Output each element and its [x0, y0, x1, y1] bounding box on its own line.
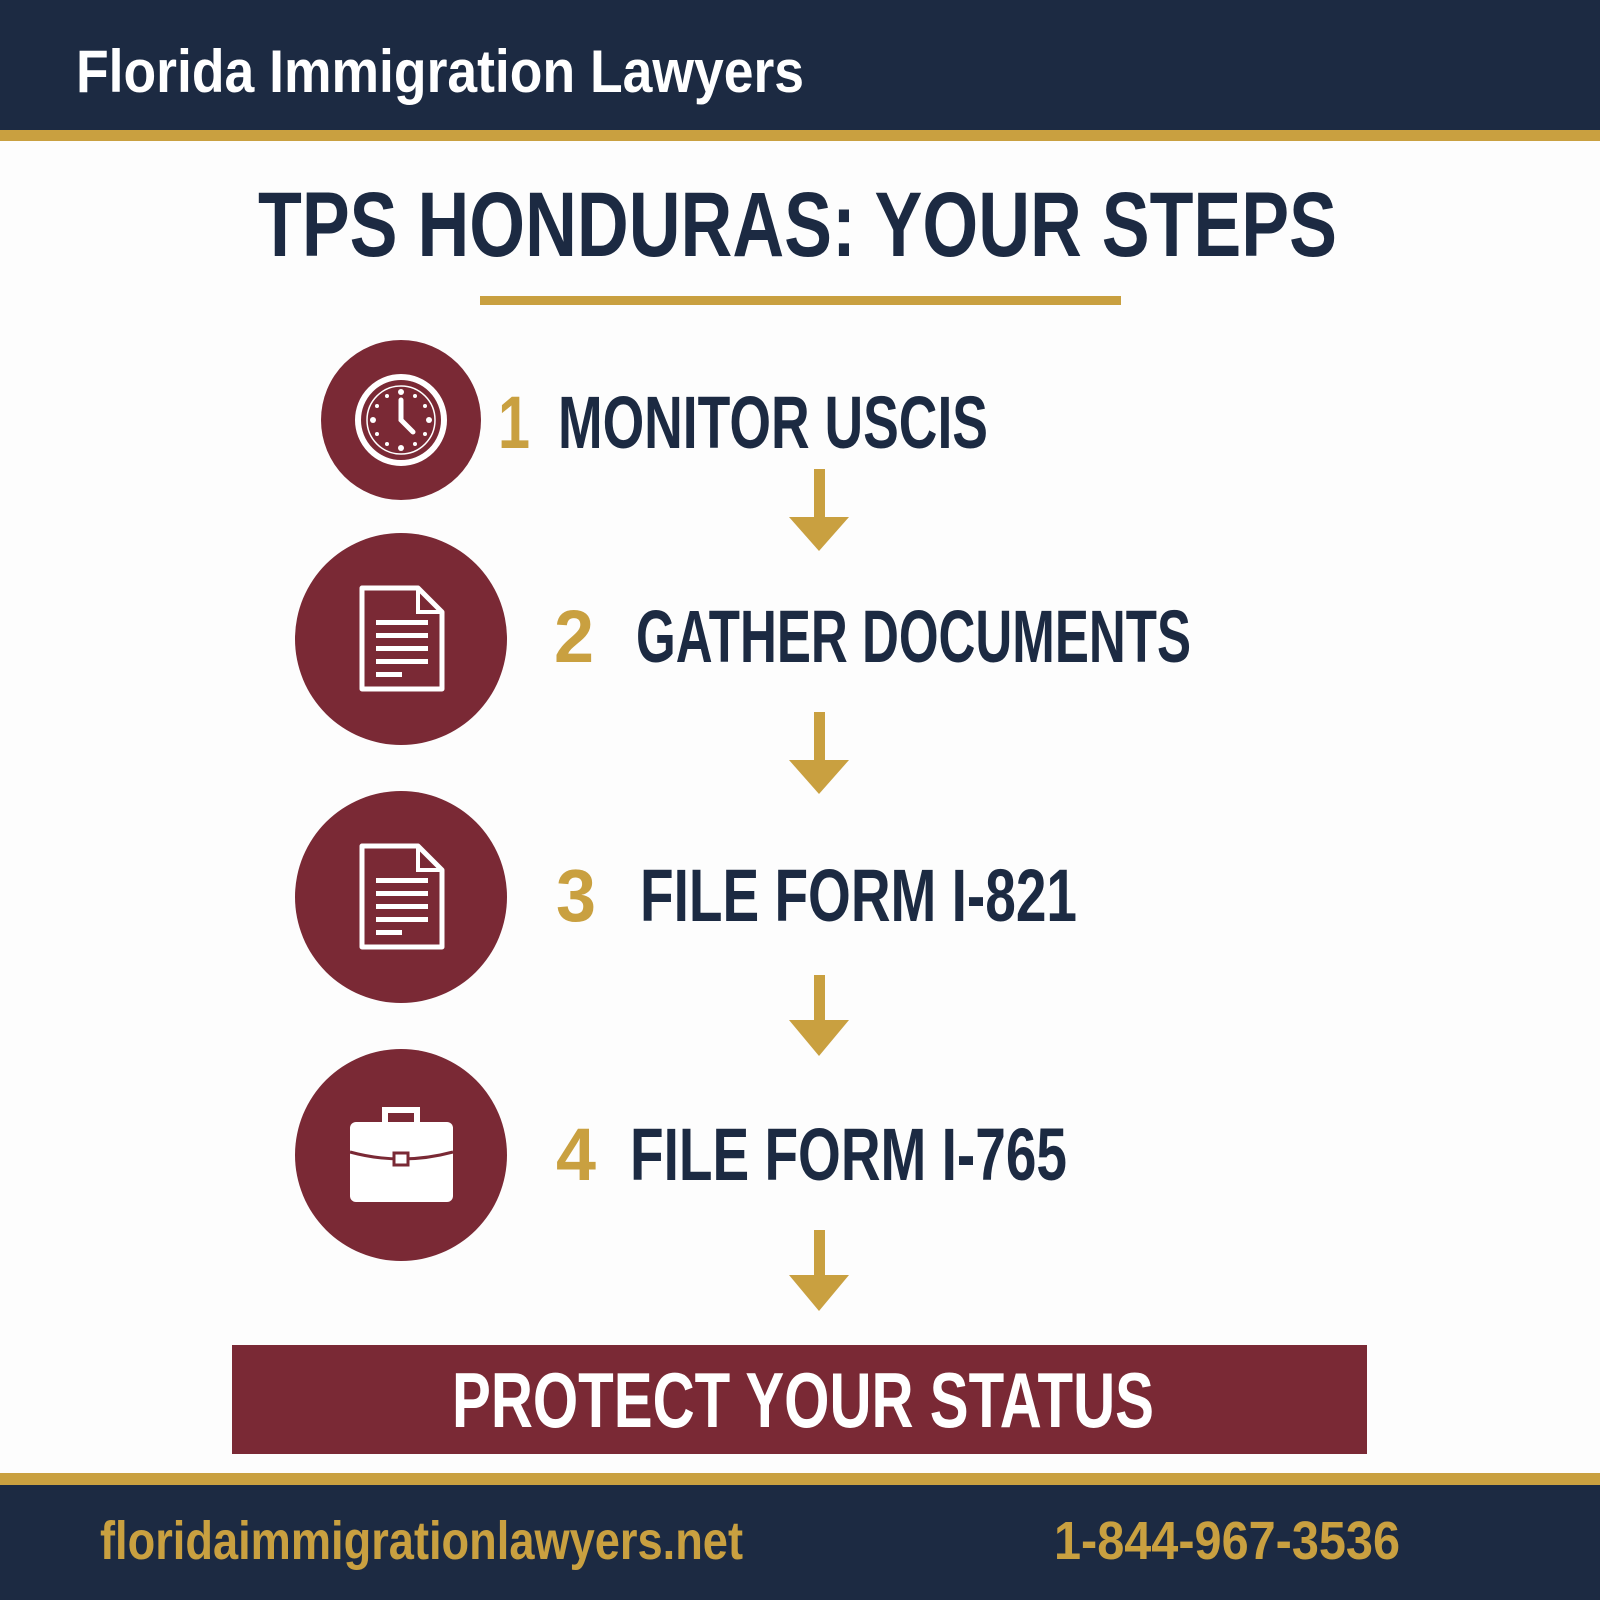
- step 1: 1: [498, 381, 530, 464]
- arrow 1: [789, 469, 849, 551]
- step 3: [295, 791, 1077, 1003]
- step 1: [321, 340, 988, 500]
- footer: [0, 1473, 1600, 1600]
- icon: briefcase: [295, 1049, 507, 1261]
- arrow 4: [789, 1230, 849, 1311]
- step 1: MONITOR USCIS: [558, 381, 988, 464]
- header text: Florida Immigration Lawyers: [76, 38, 804, 105]
- arrow 2: [789, 712, 849, 794]
- footer url: floridaimmigrationlawyers.net: [100, 1511, 743, 1571]
- step 3: FILE FORM I-821: [640, 854, 1077, 937]
- step 4: 4: [556, 1113, 596, 1196]
- step 3: 3: [556, 854, 596, 937]
- icon: form: [295, 791, 507, 1003]
- banner: protect your status: [232, 1345, 1367, 1454]
- footer phone: 1-844-967-3536: [1054, 1511, 1400, 1571]
- step 2: GATHER DOCUMENTS: [636, 595, 1191, 678]
- arrow 3: [789, 975, 849, 1056]
- icon: clock: [321, 340, 481, 500]
- header bar: [0, 0, 1600, 141]
- icon: document: [295, 533, 507, 745]
- title: [258, 174, 1337, 305]
- banner: protect your status: PROTECT YOUR STATUS: [452, 1356, 1154, 1444]
- step 2: [295, 533, 1191, 745]
- step 4: FILE FORM I-765: [630, 1113, 1067, 1196]
- step 2: 2: [554, 595, 594, 678]
- step 4: [295, 1049, 1067, 1261]
